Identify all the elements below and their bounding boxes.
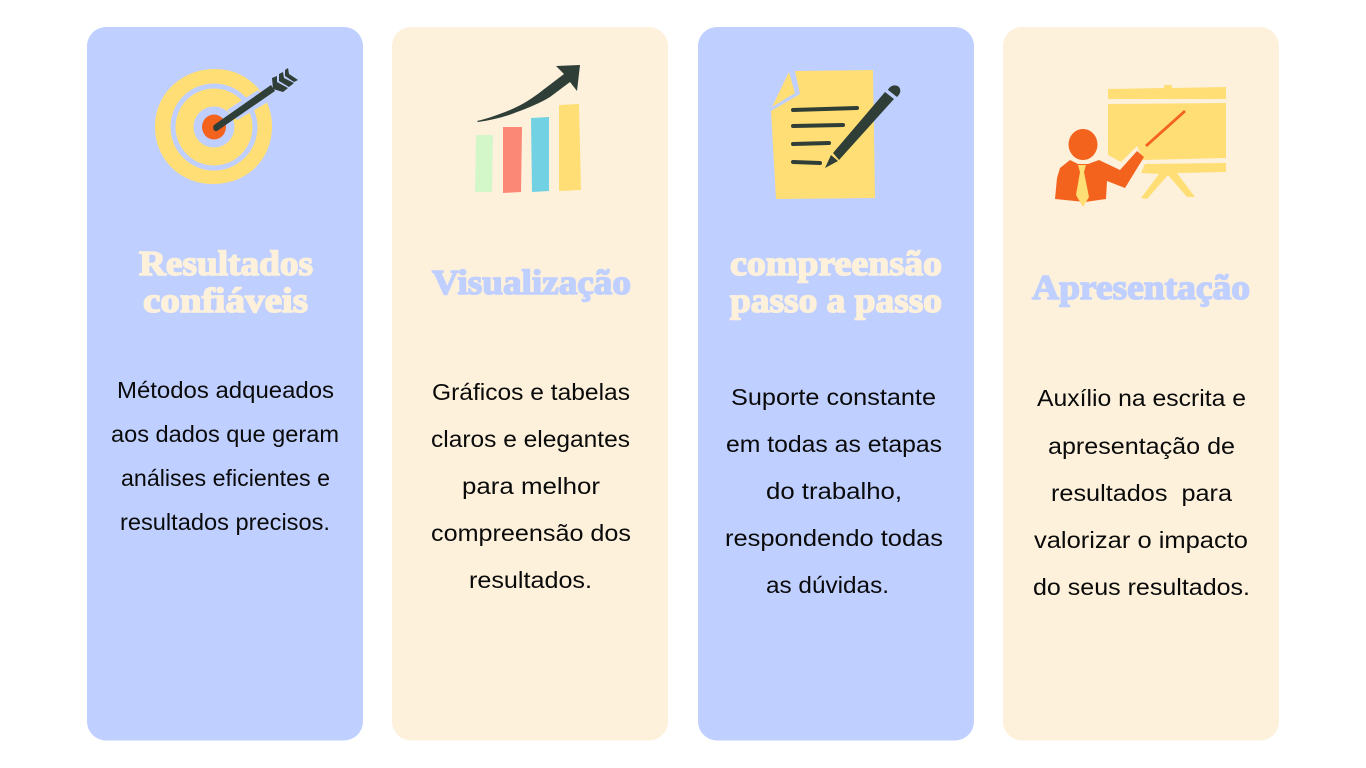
text block: do seus resultados. [1033, 574, 1250, 600]
icon: presenter with board [1055, 85, 1226, 207]
text block: Métodos adqueados [117, 377, 334, 403]
heading: compreensão [730, 244, 942, 283]
text block: análises eficientes e [121, 465, 330, 491]
panel: resultados confiáveis [87, 27, 363, 740]
text block [431, 379, 631, 593]
text block: aos dados que geram [111, 421, 339, 447]
text block: respondendo todas [725, 525, 943, 551]
text block: em todas as etapas [726, 431, 942, 457]
text block: as dúvidas. [766, 572, 889, 598]
heading: Visualização [432, 263, 631, 302]
panel: compreensão passo a passo [698, 27, 974, 740]
icon: document with pencil [771, 70, 900, 199]
heading: passo a passo [730, 281, 942, 320]
icon: target with arrow [155, 68, 298, 184]
text block: resultados para [1051, 480, 1232, 506]
heading [730, 244, 942, 320]
text block: valorizar o impacto [1034, 527, 1248, 553]
heading [139, 244, 313, 320]
heading: Apresentação [1032, 268, 1250, 307]
heading: Resultados [139, 244, 313, 283]
text block: resultados. [469, 567, 592, 593]
text block: do trabalho, [766, 478, 902, 504]
text block [725, 384, 943, 598]
panel: visualização [392, 27, 668, 740]
text block [111, 377, 339, 535]
text block: Suporte constante [731, 384, 936, 410]
text block: Auxílio na escrita e [1037, 385, 1246, 411]
heading: confiáveis [143, 281, 308, 320]
icon: rising bar chart with arrow [475, 65, 581, 193]
text block [1033, 385, 1250, 600]
text block: claros e elegantes [431, 426, 630, 452]
panel: apresentação [1003, 27, 1279, 740]
text block: resultados precisos. [120, 509, 330, 535]
text block: para melhor [462, 473, 600, 499]
text block: Gráficos e tabelas [432, 379, 630, 405]
text block: apresentação de [1048, 433, 1235, 459]
text block: compreensão dos [431, 520, 631, 546]
